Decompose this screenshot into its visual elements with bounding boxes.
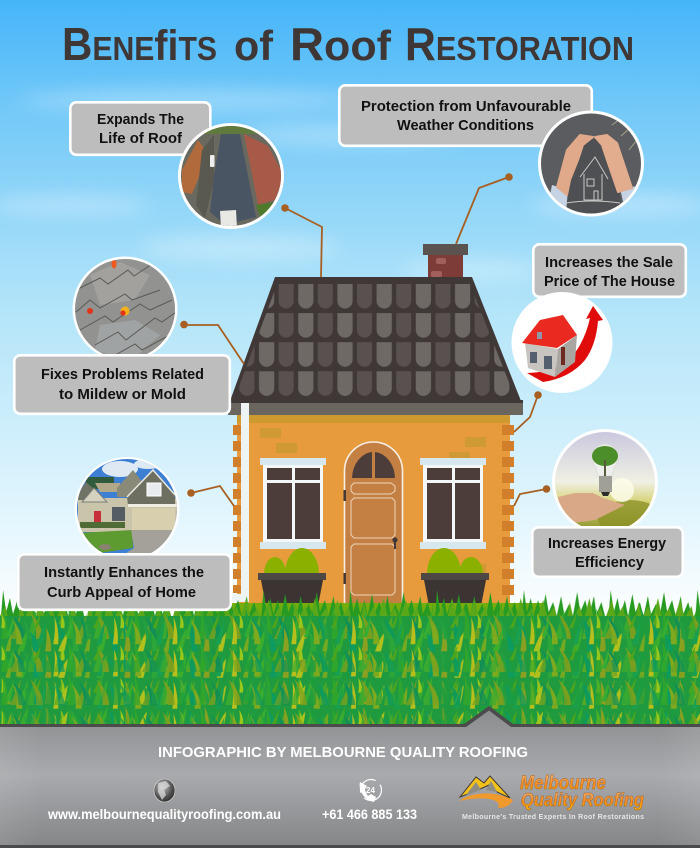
connector xyxy=(281,204,322,277)
door xyxy=(344,442,402,606)
logo: Melbourne's Trusted Experts In Roof Restorations xyxy=(462,814,644,821)
footer panel xyxy=(0,706,700,848)
title: of xyxy=(234,22,274,69)
panel: protection from weather xyxy=(339,85,644,244)
footer heading: INFOGRAPHIC BY MELBOURNE QUALITY ROOFING xyxy=(158,744,528,761)
panel: energy efficiency xyxy=(514,429,683,577)
website: www.melbournequalityroofing.com.au xyxy=(47,807,281,822)
wall xyxy=(233,415,514,607)
photo: hands protecting chalk house xyxy=(538,110,644,218)
label box: Weather Conditions xyxy=(397,117,534,134)
label box: Increases Energy xyxy=(548,535,667,552)
label box: Curb Appeal of Home xyxy=(47,584,196,601)
photo: suburban home xyxy=(74,457,180,563)
connector xyxy=(514,391,542,432)
label box: Efficiency xyxy=(575,554,645,571)
panel: increases the sale price xyxy=(512,244,686,432)
chimney xyxy=(423,244,468,278)
label box: Protection from Unfavourable xyxy=(361,98,571,115)
logo mark: roofs xyxy=(459,776,513,808)
photo: light bulb in hand xyxy=(552,429,658,526)
label box: Price of The House xyxy=(544,273,675,290)
phone number: +61 466 885 133 xyxy=(322,807,417,822)
logo xyxy=(459,773,644,821)
label box xyxy=(532,527,683,577)
connector xyxy=(187,486,234,506)
title xyxy=(62,18,634,70)
connector xyxy=(514,485,550,506)
connector xyxy=(456,173,513,244)
title: RESTORATION xyxy=(405,18,634,70)
label box xyxy=(18,554,231,610)
roof xyxy=(228,277,523,415)
grass xyxy=(0,588,700,724)
label box: Instantly Enhances the xyxy=(44,564,204,581)
panel: fixes mildew or mold xyxy=(14,256,244,414)
photo: weathered shingles xyxy=(72,256,178,362)
left planter xyxy=(258,548,326,606)
house illustration xyxy=(228,244,523,607)
label box: Expands The xyxy=(97,111,184,128)
label box: Life of Roof xyxy=(99,130,183,147)
connector xyxy=(180,321,244,364)
icon: globe xyxy=(154,779,175,802)
icon: 24 hour phone: 24 xyxy=(366,786,375,795)
panel: curb appeal xyxy=(18,457,234,610)
icon: 24 hour phone xyxy=(360,780,382,802)
title: Roof xyxy=(290,18,392,70)
sky background xyxy=(0,0,700,625)
drain pipe xyxy=(232,403,249,602)
logo: Melbourne xyxy=(520,773,606,794)
logo: Quality Roofing xyxy=(521,790,644,810)
label box: Fixes Problems Related xyxy=(41,366,204,383)
label box xyxy=(339,85,592,146)
title: BENEfiTS xyxy=(62,18,217,70)
label box xyxy=(70,102,210,155)
label box xyxy=(533,244,686,297)
photo: aerial roof xyxy=(178,123,284,229)
label box: to Mildew or Mold xyxy=(59,386,186,403)
panel: expands the life of roof xyxy=(70,102,322,277)
label box xyxy=(14,355,230,414)
label box: Increases the Sale xyxy=(545,254,673,271)
photo: house with rising arrow xyxy=(512,292,612,393)
right window xyxy=(420,458,486,549)
right planter xyxy=(421,548,489,606)
left window xyxy=(260,458,326,549)
